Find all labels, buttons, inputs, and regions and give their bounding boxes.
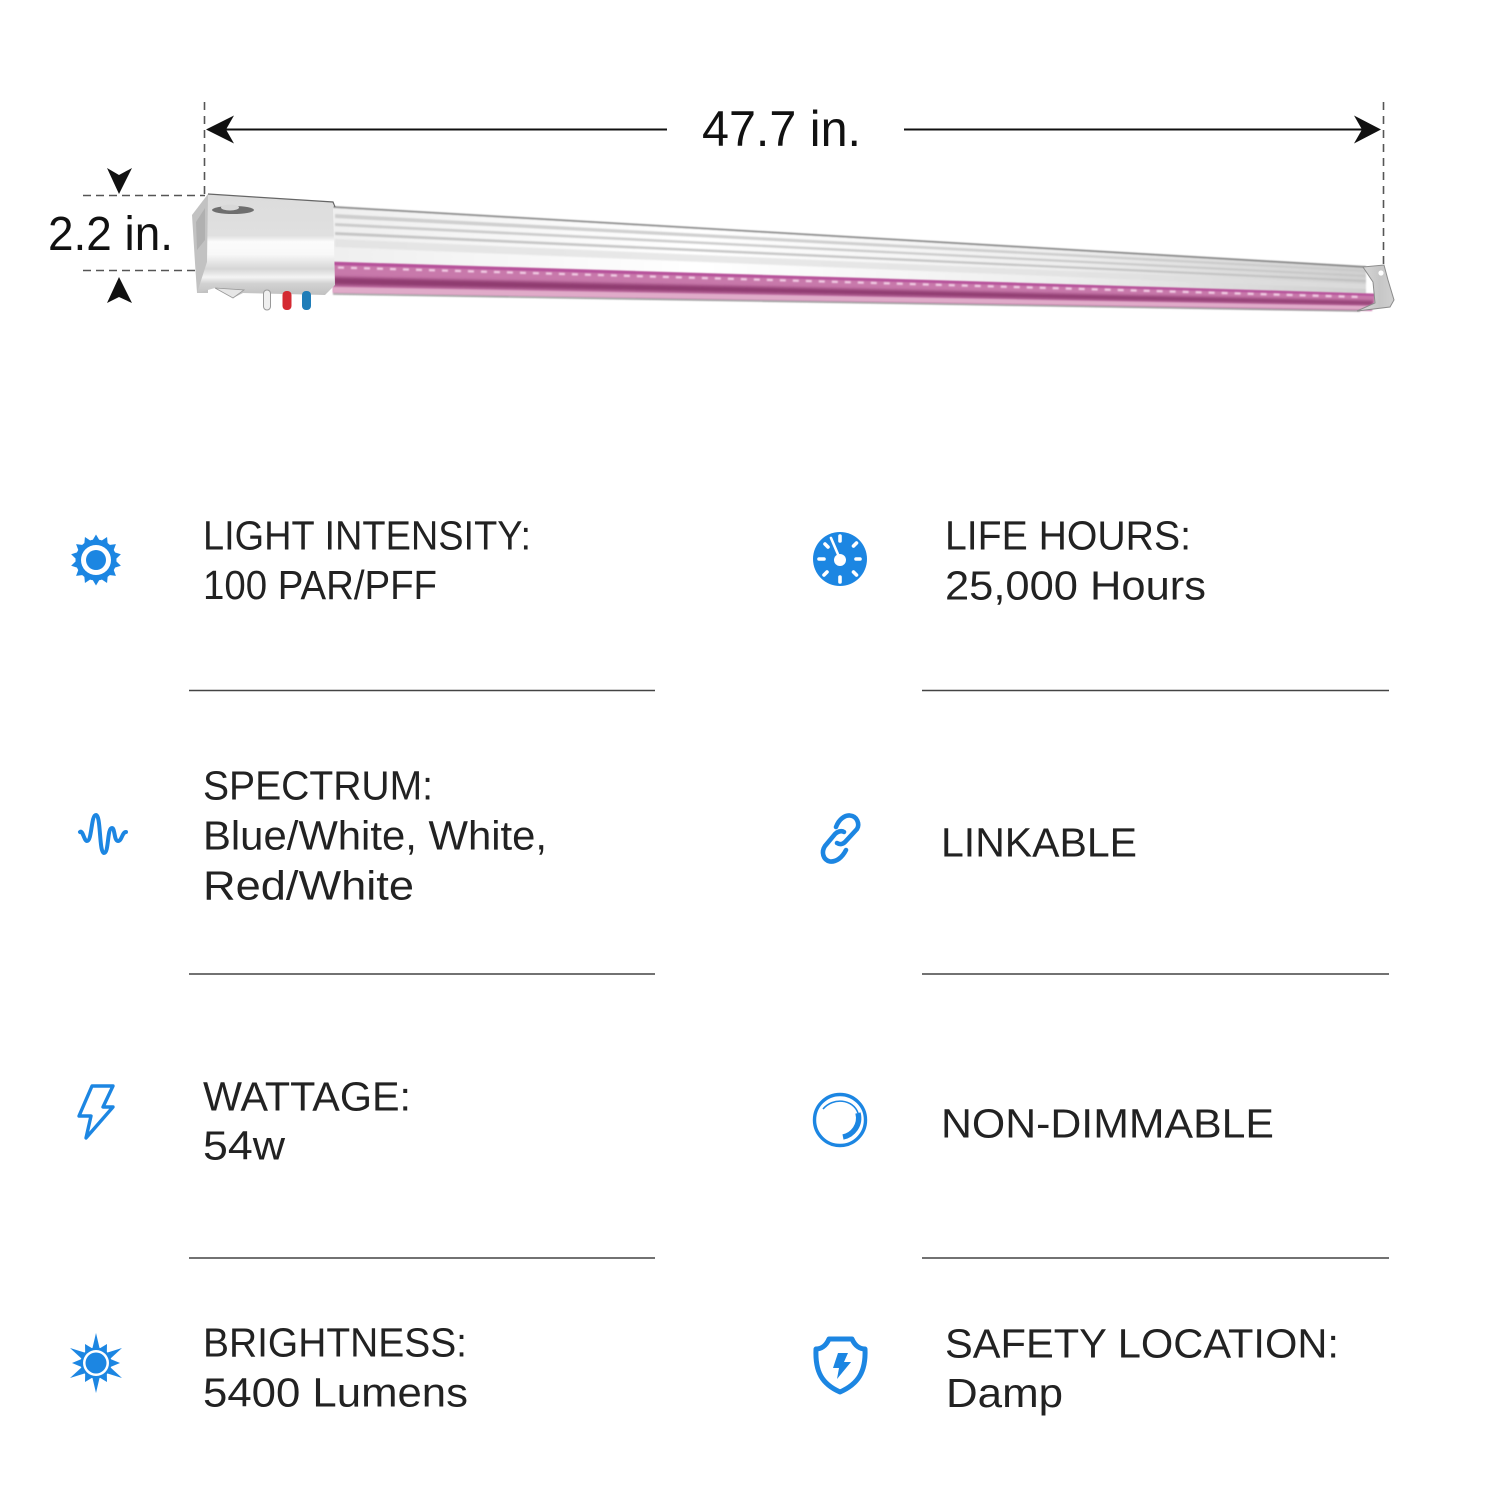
right arrow bbox=[904, 116, 1381, 144]
spec: non-dimmable bbox=[814, 1094, 1274, 1146]
label: spectrum: SPECTRUM: bbox=[203, 762, 433, 808]
wire: white bbox=[264, 290, 270, 310]
spec: light intensity bbox=[70, 512, 531, 608]
icon: chain link bbox=[823, 815, 858, 862]
pink LED strip bbox=[333, 262, 1376, 311]
height dimension label: 2.2 in. bbox=[48, 208, 173, 261]
housing bbox=[192, 194, 335, 298]
spec: safety location bbox=[816, 1320, 1339, 1416]
icon: dial clock bbox=[813, 532, 867, 586]
product image: LED light bar bbox=[192, 194, 1394, 311]
label: non-dimmable: NON-DIMMABLE bbox=[941, 1100, 1274, 1146]
end cap bbox=[1357, 265, 1394, 311]
icon: lightning bolt bbox=[79, 1086, 113, 1138]
spec: linkable bbox=[823, 815, 1137, 866]
icon: sun gear bbox=[70, 534, 122, 586]
spec: brightness bbox=[68, 1320, 468, 1416]
value: brightness: 5400 Lumens bbox=[203, 1370, 468, 1416]
value: light intensity: 100 PAR/PFF bbox=[203, 562, 437, 608]
top arrow bbox=[107, 168, 132, 194]
label: life hours: LIFE HOURS: bbox=[945, 512, 1191, 558]
icon: wave bbox=[80, 815, 126, 853]
tube body bbox=[333, 207, 1366, 296]
icon: bright star bbox=[68, 1333, 124, 1393]
left arrow bbox=[206, 116, 667, 144]
value: wattage: 54w bbox=[203, 1122, 285, 1168]
label: wattage: WATTAGE: bbox=[203, 1074, 411, 1120]
height dimension: 2.2 in. bbox=[48, 168, 205, 303]
label: linkable: LINKABLE bbox=[941, 820, 1137, 866]
panel: left column specs bbox=[68, 512, 655, 1416]
wire: red bbox=[282, 291, 292, 310]
icon: shield bolt bbox=[816, 1339, 865, 1392]
value: spectrum line 1: Blue/White, White, bbox=[203, 812, 547, 858]
bottom arrow bbox=[107, 277, 132, 303]
width dimension label: 47.7 in. bbox=[702, 101, 861, 157]
width dimension: 47.7 in. bbox=[204, 101, 1384, 268]
panel: right column specs bbox=[813, 512, 1389, 1416]
label: safety location: SAFETY LOCATION: bbox=[945, 1320, 1339, 1366]
wire: blue bbox=[302, 291, 311, 310]
label: light intensity: LIGHT INTENSITY: bbox=[203, 512, 531, 558]
icon: ring bbox=[814, 1094, 866, 1146]
spec: spectrum bbox=[80, 762, 547, 908]
label: brightness: BRIGHTNESS: bbox=[203, 1320, 467, 1366]
spec: life hours bbox=[813, 512, 1206, 608]
value: life hours: 25,000 Hours bbox=[945, 562, 1206, 608]
spec: wattage bbox=[79, 1074, 411, 1168]
value: spectrum line 2: Red/White bbox=[203, 862, 414, 908]
value: safety location: Damp bbox=[946, 1370, 1063, 1416]
